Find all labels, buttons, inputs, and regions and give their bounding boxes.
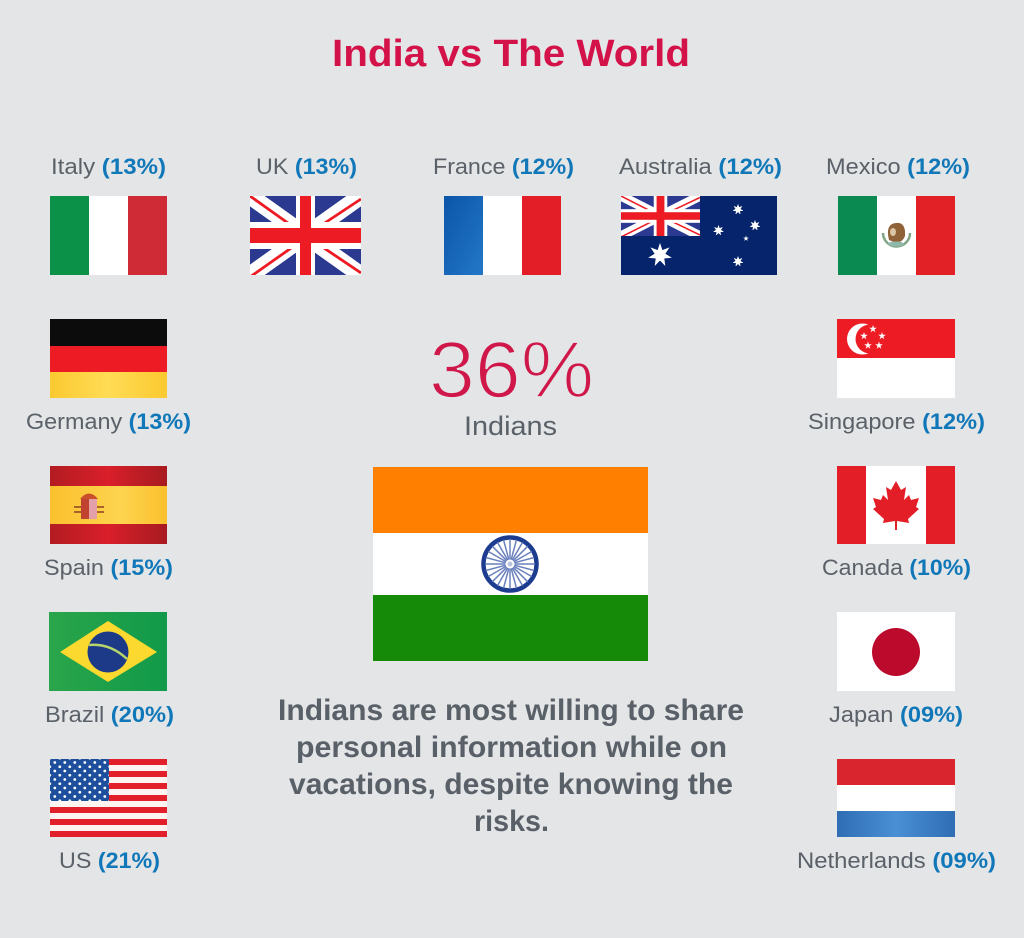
flag: Singapore — [837, 319, 955, 398]
label: Canada: Canada (10%) — [822, 555, 971, 580]
flag: Brazil — [49, 612, 167, 691]
text block: conclusion: risks. — [474, 805, 549, 838]
flag: Italy — [50, 196, 167, 275]
label: Netherlands: Netherlands (09%) — [797, 848, 996, 873]
flag: Germany — [50, 319, 167, 398]
flag: US — [50, 759, 167, 837]
text block: conclusion: Indians are most willing to share — [278, 694, 744, 727]
label: Singapore: Singapore (12%) — [808, 409, 985, 434]
label: Italy: Italy (13%) — [51, 154, 166, 179]
flag: Canada — [837, 466, 955, 544]
label: Japan: Japan (09%) — [829, 702, 963, 727]
label: Indians: Indians — [464, 411, 557, 441]
title: India vs The World — [332, 33, 690, 75]
icon: Ashoka chakra — [484, 538, 536, 590]
flag: UK — [250, 196, 361, 275]
flag: Japan — [837, 612, 955, 691]
text block: conclusion: personal information while on — [296, 731, 727, 764]
label: Mexico: Mexico (12%) — [826, 154, 970, 179]
label: Spain: Spain (15%) — [44, 555, 173, 580]
flag: Spain — [50, 466, 167, 544]
headline figure: 36%: 36% — [429, 325, 594, 414]
label: France: France (12%) — [433, 154, 574, 179]
label: Australia: Australia (12%) — [619, 154, 782, 179]
text block: conclusion — [278, 694, 744, 838]
flag: India — [373, 467, 648, 661]
label: Germany: Germany (13%) — [26, 409, 191, 434]
flag: Netherlands — [837, 759, 955, 837]
label: US: US (21%) — [59, 848, 160, 873]
flag: France — [444, 196, 561, 275]
label: UK: UK (13%) — [256, 154, 357, 179]
flag: Australia — [621, 196, 777, 275]
flag: Mexico — [838, 196, 955, 275]
text block: conclusion: vacations, despite knowing the — [289, 768, 733, 801]
label: Brazil: Brazil (20%) — [45, 702, 174, 727]
